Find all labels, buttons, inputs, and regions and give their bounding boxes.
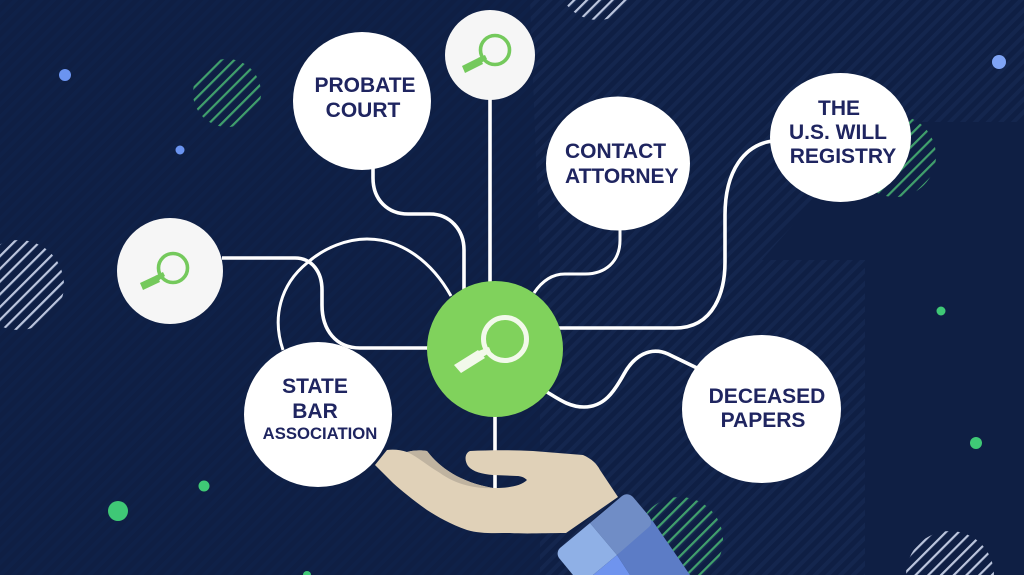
node: deceased papers: PAPERS	[721, 409, 805, 432]
node: deceased papers	[682, 335, 841, 483]
hatched circle: white left	[0, 240, 64, 330]
icon: magnifier	[454, 318, 526, 373]
node: contact attorney	[546, 96, 690, 230]
hand	[375, 450, 618, 533]
node: deceased papers: DECEASED	[709, 385, 825, 408]
node: probate court: PROBATE	[314, 74, 416, 97]
node: magnifier left	[117, 218, 223, 324]
hatched circle: white top	[563, 0, 633, 20]
icon: magnifier top	[462, 36, 510, 73]
hatched circle: green top left	[193, 59, 261, 127]
hatched circle: white bottom right	[906, 531, 994, 575]
node: state bar association: ASSOCIATION	[263, 424, 377, 443]
shirt sleeve	[558, 494, 690, 575]
icon: magnifier left	[140, 254, 188, 290]
node: state bar association: BAR	[292, 400, 338, 423]
node: contact attorney: ATTORNEY	[565, 165, 679, 188]
hatched circle: green behind registry	[854, 115, 936, 197]
node: the U.S. will registry: THE	[818, 97, 860, 120]
node: state bar association: STATE	[282, 375, 348, 398]
node: the U.S. will registry: REGISTRY	[790, 145, 896, 168]
node: the U.S. will registry	[770, 73, 911, 202]
node: contact attorney: CONTACT	[565, 140, 666, 163]
node: state bar association	[244, 342, 392, 487]
node: the U.S. will registry: U.S. WILL	[789, 121, 887, 144]
central green circle with magnifier	[427, 281, 563, 417]
node: magnifier top	[445, 10, 535, 100]
node: probate court	[293, 32, 431, 170]
connector lines	[222, 98, 772, 488]
node: probate court: COURT	[326, 99, 400, 122]
hatched circle: green behind sleeve	[637, 497, 723, 575]
